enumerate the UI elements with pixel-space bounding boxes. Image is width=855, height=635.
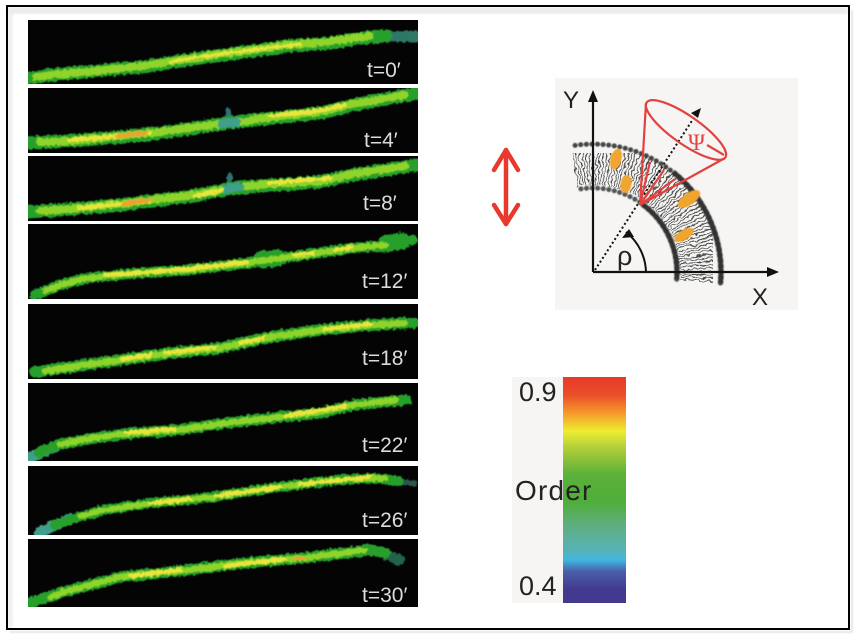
strand t=22 <box>30 400 406 458</box>
panel: t=26 time-lapse image <box>28 466 418 535</box>
panel: t=18 time-lapse image <box>28 304 418 379</box>
panel: t=0 time-lapse image <box>28 20 418 84</box>
Y axis label: Y <box>563 87 579 114</box>
time label t=12: t=12′ <box>362 270 407 293</box>
time label t=18: t=18′ <box>362 347 407 370</box>
strand t=30 <box>30 550 400 603</box>
time label t=22: t=22′ <box>362 434 407 457</box>
time label t=30: t=30′ <box>362 584 407 607</box>
rho angle arc <box>622 229 646 272</box>
strand t=12 <box>35 240 412 295</box>
colour scale legend <box>512 377 626 603</box>
strand t=26 <box>40 477 415 532</box>
max value: 0.9 <box>519 377 557 407</box>
panel: membrane orientation diagram <box>555 78 798 311</box>
rho label: ρ <box>617 241 632 271</box>
panel: t=30 time-lapse image <box>28 539 418 607</box>
time label t=0: t=0′ <box>367 59 401 82</box>
colour bar <box>563 377 626 603</box>
strand t=18 <box>35 323 413 372</box>
membrane bilayer <box>571 144 721 283</box>
psi symbol: Ψ <box>688 130 705 155</box>
panel: t=4 time-lapse image <box>28 88 418 153</box>
dotted direction line <box>595 108 701 270</box>
axis name: Order <box>515 475 593 506</box>
time label t=8: t=8′ <box>363 192 397 215</box>
x and y axes <box>588 90 779 277</box>
strand t=4 <box>28 93 417 143</box>
strand t=0 <box>28 36 417 78</box>
red cone <box>639 91 733 205</box>
strand t=8 <box>28 165 417 212</box>
min value: 0.4 <box>519 571 557 601</box>
time label t=4: t=4′ <box>364 129 398 152</box>
icon: red double-headed arrow <box>494 150 518 224</box>
orange molecules <box>608 147 703 245</box>
time label t=26: t=26′ <box>362 509 407 532</box>
panel: t=22 time-lapse image <box>28 383 418 461</box>
X axis label: X <box>752 284 768 311</box>
panel: t=12 time-lapse image <box>28 224 418 299</box>
panel: t=8 time-lapse image <box>28 156 418 221</box>
